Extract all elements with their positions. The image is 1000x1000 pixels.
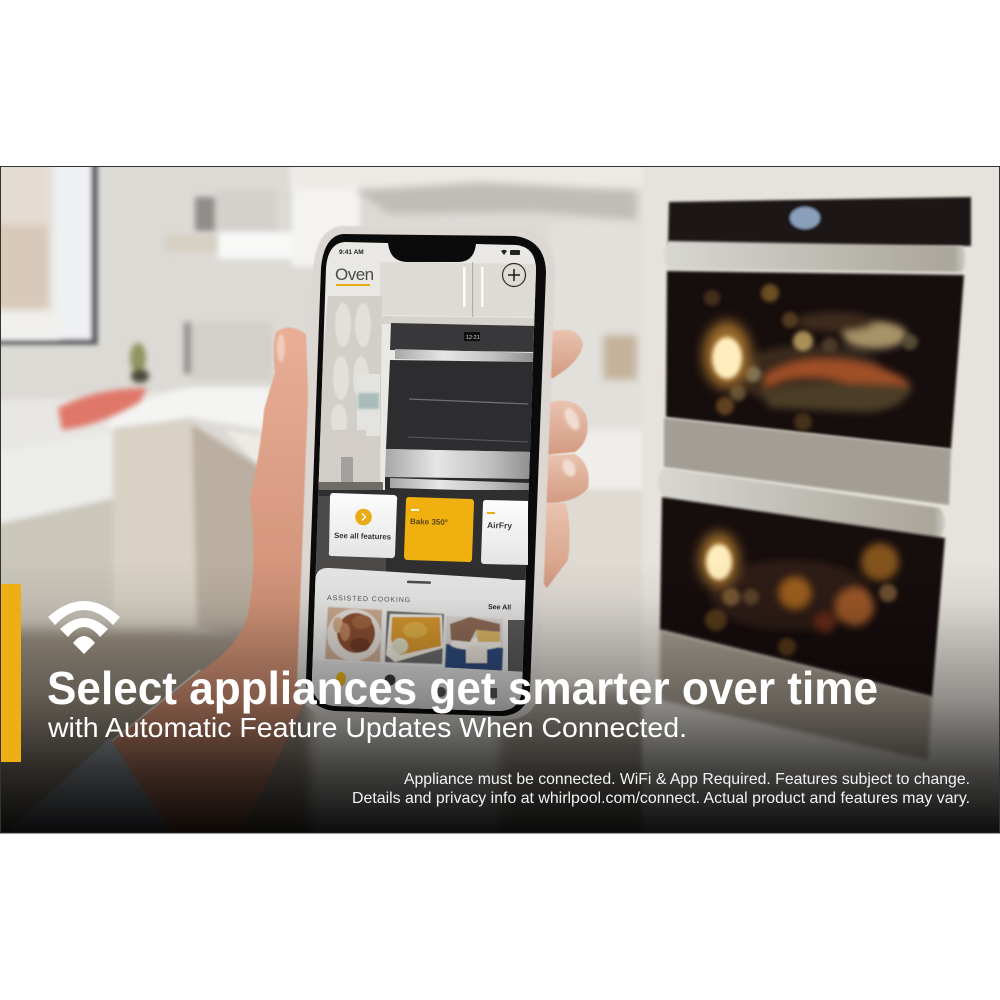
finger highlights: [562, 407, 580, 478]
shelf and items: [165, 167, 360, 380]
finger 3: [546, 454, 590, 504]
phone screen: [312, 242, 536, 711]
subtitle: with Automatic Feature Updates When Connected.: [47, 712, 687, 743]
lower handle: [658, 468, 945, 538]
red towel: [58, 388, 147, 430]
app oven: [390, 323, 536, 352]
cabinets: [380, 262, 536, 317]
accent bar: [1, 584, 21, 762]
nav icons: [336, 672, 497, 698]
assisted cooking label: ASSISTED COOKING: [327, 595, 411, 604]
disclaimer: Details and privacy info at whirlpool.com/connect. Actual product and features may vary.: [352, 790, 970, 807]
photo frame: [0, 166, 1000, 833]
nav bar: [305, 660, 528, 720]
title: Select appliances get smarter over time: [47, 662, 878, 714]
disclaimer: [352, 771, 970, 807]
phone case: [297, 226, 555, 720]
food 2: [385, 611, 444, 664]
upper control panel: [668, 197, 971, 246]
plus button: [502, 264, 526, 286]
upper oven glow: [735, 312, 912, 412]
center lower cabinet: [584, 490, 639, 494]
thumb nail: [277, 334, 285, 362]
card: airfry: [481, 500, 528, 565]
oven cabinet surround: [642, 160, 1000, 840]
icon: hand holding phone: [0, 327, 589, 840]
lower oven window: [660, 497, 945, 697]
food 4: [508, 620, 528, 672]
icon: wifi: [48, 601, 120, 654]
card: see all features: [329, 493, 397, 558]
wall art: [357, 374, 380, 436]
food 3: [445, 616, 503, 671]
card: airfry: AirFry: [487, 520, 513, 531]
palm and thumb: [112, 327, 312, 840]
range hood and upper center: [292, 160, 652, 492]
countertop: [1, 392, 262, 446]
disclaimer: Appliance must be connected. WiFi & App Required. Features subject to change.: [404, 771, 970, 788]
icon: smartphone: [297, 226, 555, 720]
floor: [0, 630, 310, 850]
card: bake 350: Bake 350°: [410, 517, 448, 527]
plant: [130, 343, 149, 383]
phone screen: 12:21: [466, 335, 480, 341]
bottom trim: [660, 630, 932, 760]
food 1: [325, 607, 382, 662]
lamp: [333, 430, 366, 436]
phone screen: See All: [488, 604, 511, 612]
heading: Oven: [335, 265, 374, 284]
finger 2: [548, 400, 588, 455]
upper oven window: [666, 271, 964, 449]
palm rim highlight: [112, 670, 200, 741]
card: see all features: See all features: [334, 531, 392, 542]
wallpaper: [312, 296, 382, 490]
finger 4: [543, 502, 570, 588]
lower oven glow: [710, 543, 899, 633]
sheet: [305, 568, 525, 720]
card: bake 350: [404, 497, 474, 562]
finger 1: [550, 330, 584, 378]
panel: double wall oven: [642, 160, 1000, 840]
sleeve: [38, 738, 152, 806]
status bar: 9:41 AM: [339, 249, 364, 256]
phone bezel: [306, 234, 546, 716]
steel band: [664, 418, 951, 505]
photo: blurred kitchen background: [0, 160, 1000, 850]
bottom dark gradient overlay: [0, 560, 1000, 835]
upper handle: [664, 241, 966, 272]
lower cabinets: [1, 419, 257, 634]
window: [0, 160, 98, 345]
wall strip: [380, 316, 536, 326]
